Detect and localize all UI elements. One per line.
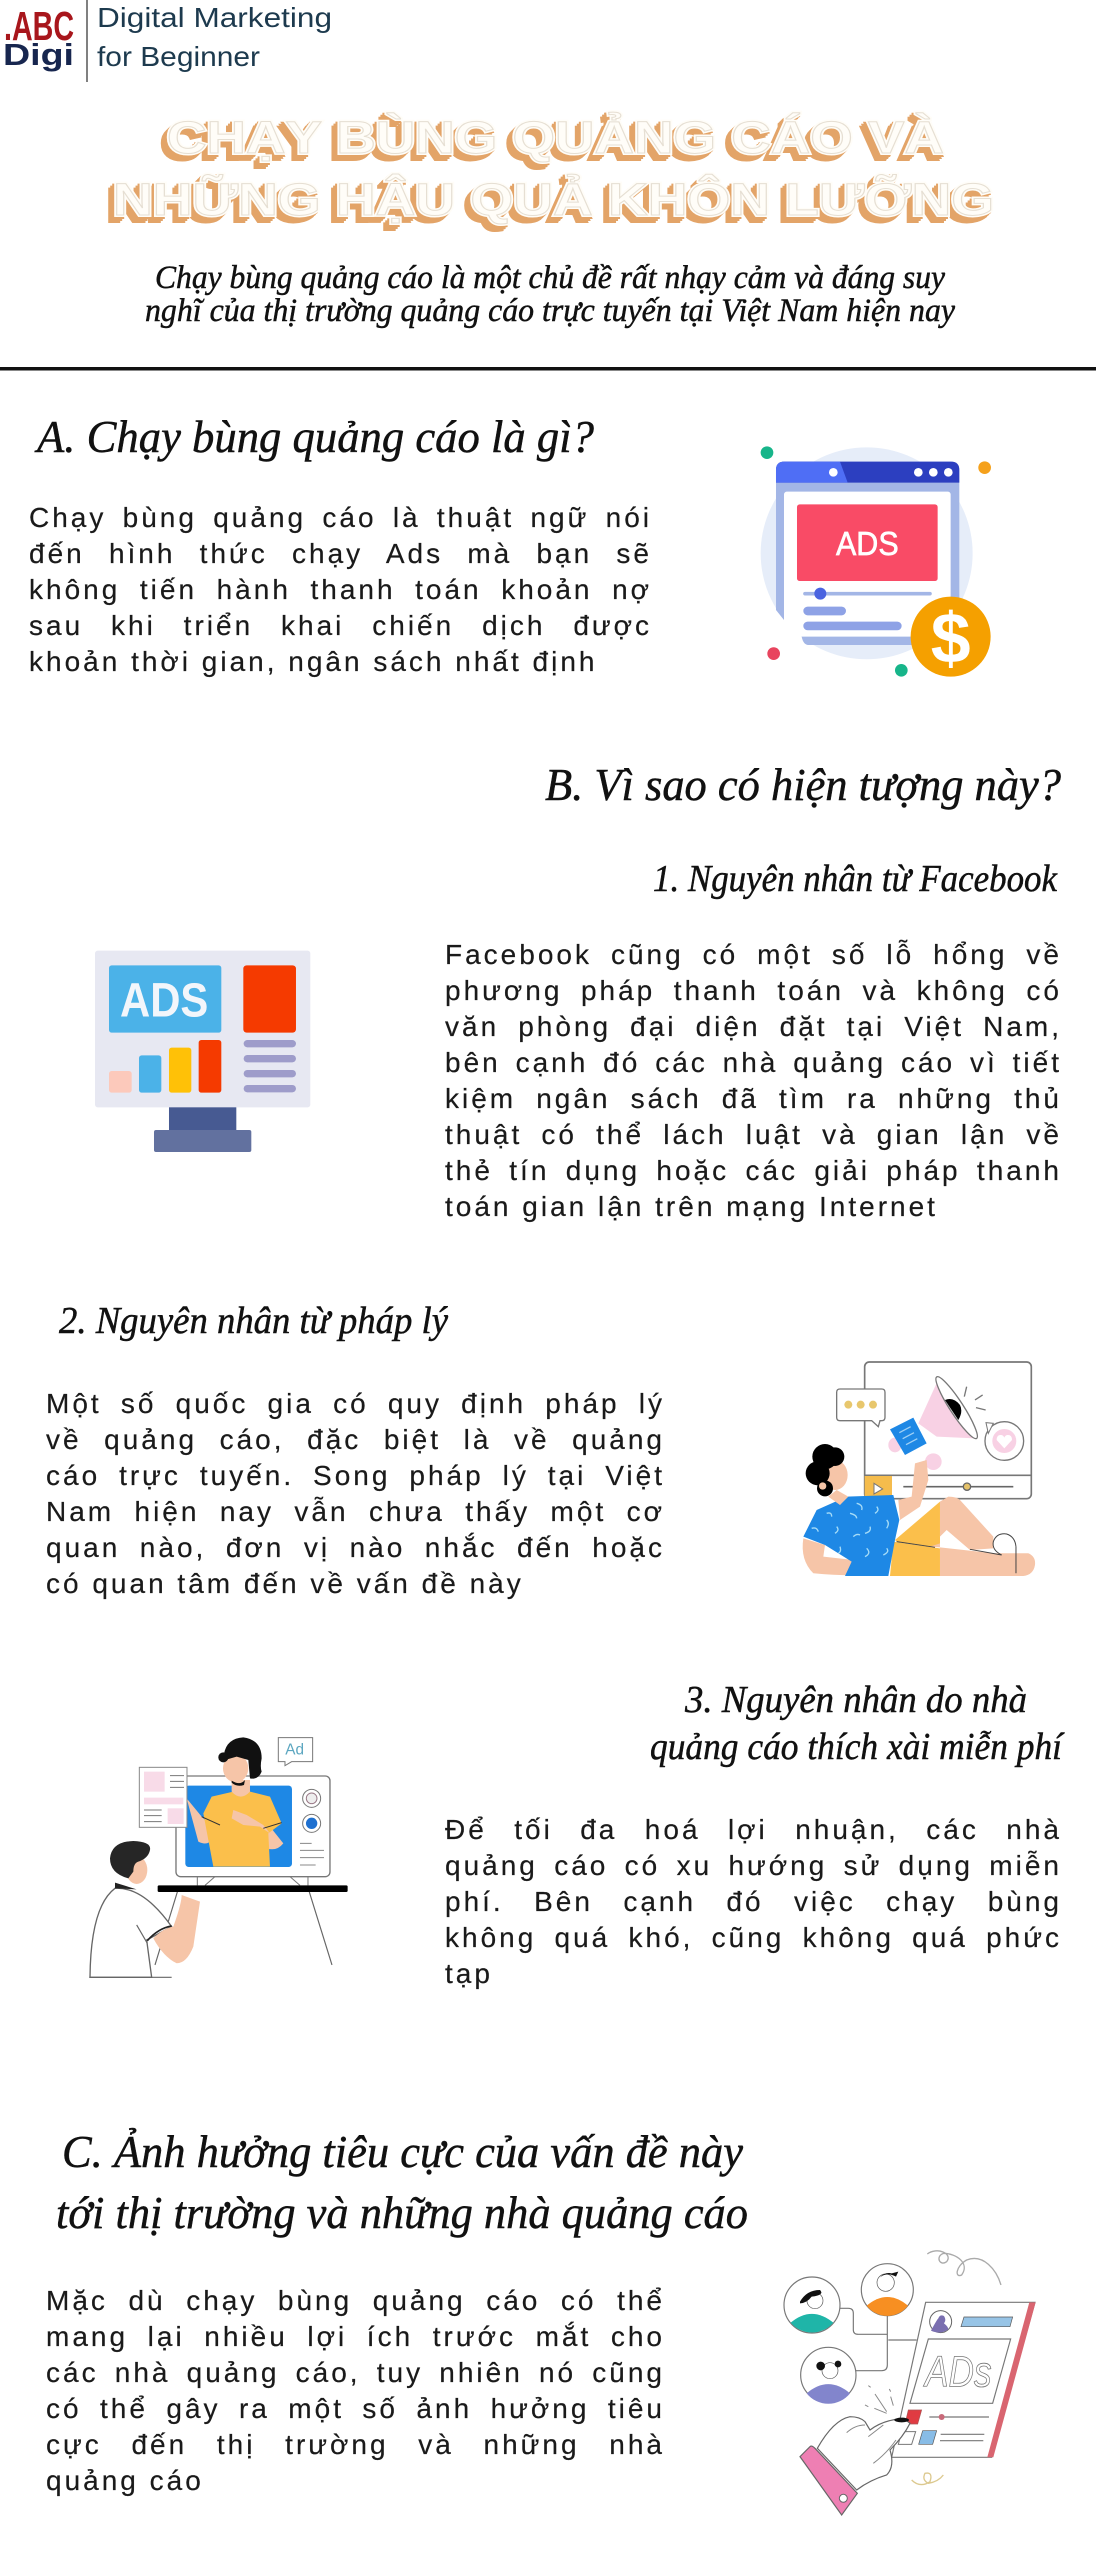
heading: cause 2: 2. Nguyên nhân từ pháp lý (59, 1300, 448, 1342)
text block: cause 2: có quan tâm đến về vấn đề này (46, 1568, 524, 1599)
title: NHỮNG HẬU QUẢ KHÔN LƯỠNG (107, 180, 988, 231)
text block: negative impact: mang lại nhiều lợi ích trước mắt cho (46, 2321, 665, 2352)
text block: negative impact: có thể gây ra một số ảnh hưởng tiêu (46, 2393, 665, 2424)
text block: cause 3: không quá khó, cũng không quá phức (445, 1922, 1062, 1953)
icon: person with megaphone and video player (803, 1362, 1035, 1576)
title: NHỮNG HẬU QUẢ KHÔN LƯỠNG (111, 176, 992, 227)
text block: definition: Chạy bùng quảng cáo là thuật ngữ nói (29, 502, 652, 533)
text block: cause 2: quan nào, đơn vị nào nhắc đến hoặc (46, 1532, 665, 1563)
icon: ads browser window with dollar coin: $ (931, 599, 971, 679)
text block: cause 3: quảng cáo có xu hướng sử dụng miễn (445, 1850, 1062, 1881)
title: CHẠY BÙNG QUẢNG CÁO VÀ (165, 114, 942, 165)
subtitle: nghĩ của thị trường quảng cáo trực tuyến tại Việt Nam hiện nay (145, 293, 955, 329)
text block: cause 3: Để tối đa hoá lợi nhuận, các nhà (445, 1814, 1062, 1845)
text block: cause 2: về quảng cáo, đặc biệt là về quảng (46, 1424, 665, 1455)
heading: cause 1: 1. Nguyên nhân từ Facebook (653, 858, 1058, 900)
text block: cause 1 (445, 939, 1062, 1222)
icon: hand clicking ad page with audience avatars: ADs (923, 2349, 992, 2397)
heading: section C: C. Ảnh hưởng tiêu cực của vấn đề này (62, 2126, 744, 2177)
title: CHẠY BÙNG QUẢNG CÁO VÀ (167, 112, 944, 163)
logo: Digital Marketing (97, 2, 332, 33)
text block: cause 1: Facebook cũng có một số lỗ hổng về (445, 939, 1062, 970)
icon: ads browser window with dollar coin (761, 446, 991, 679)
text block: definition: khoản thời gian, ngân sách nhất định (29, 646, 597, 677)
text block: cause 3: tạp (445, 1958, 493, 1989)
text block: cause 3: phí. Bên cạnh đó việc chạy bùng (445, 1886, 1062, 1917)
text block: cause 2: Một số quốc gia có quy định pháp lý (46, 1388, 665, 1419)
text block: cause 1: phương pháp thanh toán và không có (445, 975, 1062, 1006)
text block: cause 1: toán gian lận trên mạng Internet (445, 1191, 938, 1222)
title: NHỮNG HẬU QUẢ KHÔN LƯỠNG (113, 174, 994, 225)
title: CHẠY BÙNG QUẢNG CÁO VÀ (163, 116, 940, 167)
text block: definition: đến hình thức chạy Ads mà bạn sẽ (29, 538, 652, 569)
logo: for Beginner (97, 41, 260, 72)
text block: cause 2 (46, 1388, 665, 1600)
heading: cause 3: quảng cáo thích xài miễn phí (650, 1726, 1065, 1768)
text block: cause 1: văn phòng đại diện đặt tại Việt Nam, (445, 1011, 1062, 1042)
text block: negative impact: quảng cáo (46, 2465, 204, 2496)
title: CHẠY BÙNG QUẢNG CÁO VÀ (161, 118, 938, 169)
subtitle: Chạy bùng quảng cáo là một chủ đề rất nhạy cảm và đáng suy (155, 260, 945, 296)
logo: .ABC (4, 3, 74, 49)
title: NHỮNG HẬU QUẢ KHÔN LƯỠNG (113, 174, 994, 225)
icon: hand clicking ad page with audience avatars (784, 2251, 1036, 2515)
text block: cause 2: cáo trực tuyến. Song pháp lý tại Việt (46, 1460, 665, 1491)
icon: monitor with ads and bars: ADS (120, 974, 208, 1028)
text block: negative impact: cực đến thị trường và những nhà (46, 2429, 665, 2460)
title (107, 112, 994, 231)
text block: cause 3 (445, 1814, 1062, 1990)
title: NHỮNG HẬU QUẢ KHÔN LƯỠNG (109, 178, 990, 229)
icon: ads browser window with dollar coin: ADS (836, 526, 899, 563)
heading: section B: B. Vì sao có hiện tượng này? (545, 759, 1061, 810)
text block: negative impact: các nhà quảng cáo, tuy nhiên nó cũng (46, 2357, 665, 2388)
text block: cause 1: kiệm ngân sách đã tìm ra những thủ (445, 1083, 1062, 1114)
text block: negative impact (46, 2285, 665, 2496)
icon: man watching ad on screen (89, 1737, 348, 1977)
logo: Digi (3, 37, 74, 72)
text block: definition (29, 502, 652, 678)
heading: cause 3 (650, 1679, 1065, 1768)
heading: section A: A. Chạy bùng quảng cáo là gì? (34, 411, 594, 462)
heading: cause 3: 3. Nguyên nhân do nhà (684, 1679, 1027, 1721)
text block: definition: không tiến hành thanh toán khoản nợ (29, 574, 652, 605)
text block: cause 1: thẻ tín dụng hoặc các giải pháp thanh (445, 1155, 1062, 1186)
logo (3, 0, 332, 82)
text block: cause 1: thuật có thể lách luật và gian lận về (445, 1119, 1062, 1150)
text block: cause 1: bên cạnh đó các nhà quảng cáo vì tiết (445, 1047, 1062, 1078)
text block: definition: sau khi triển khai chiến dịch được (29, 610, 652, 641)
heading: section C: tới thị trường và những nhà quảng cáo (56, 2187, 748, 2238)
heading: section C (56, 2126, 748, 2238)
text block: cause 2: Nam hiện nay vẫn chưa thấy một cơ (46, 1496, 665, 1527)
title: CHẠY BÙNG QUẢNG CÁO VÀ (167, 112, 944, 163)
text block: negative impact: Mặc dù chạy bùng quảng cáo có thể (46, 2285, 665, 2316)
subtitle (145, 260, 955, 329)
icon: monitor with ads and bars (95, 951, 310, 1152)
icon: man watching ad on screen: Ad (285, 1741, 304, 1758)
